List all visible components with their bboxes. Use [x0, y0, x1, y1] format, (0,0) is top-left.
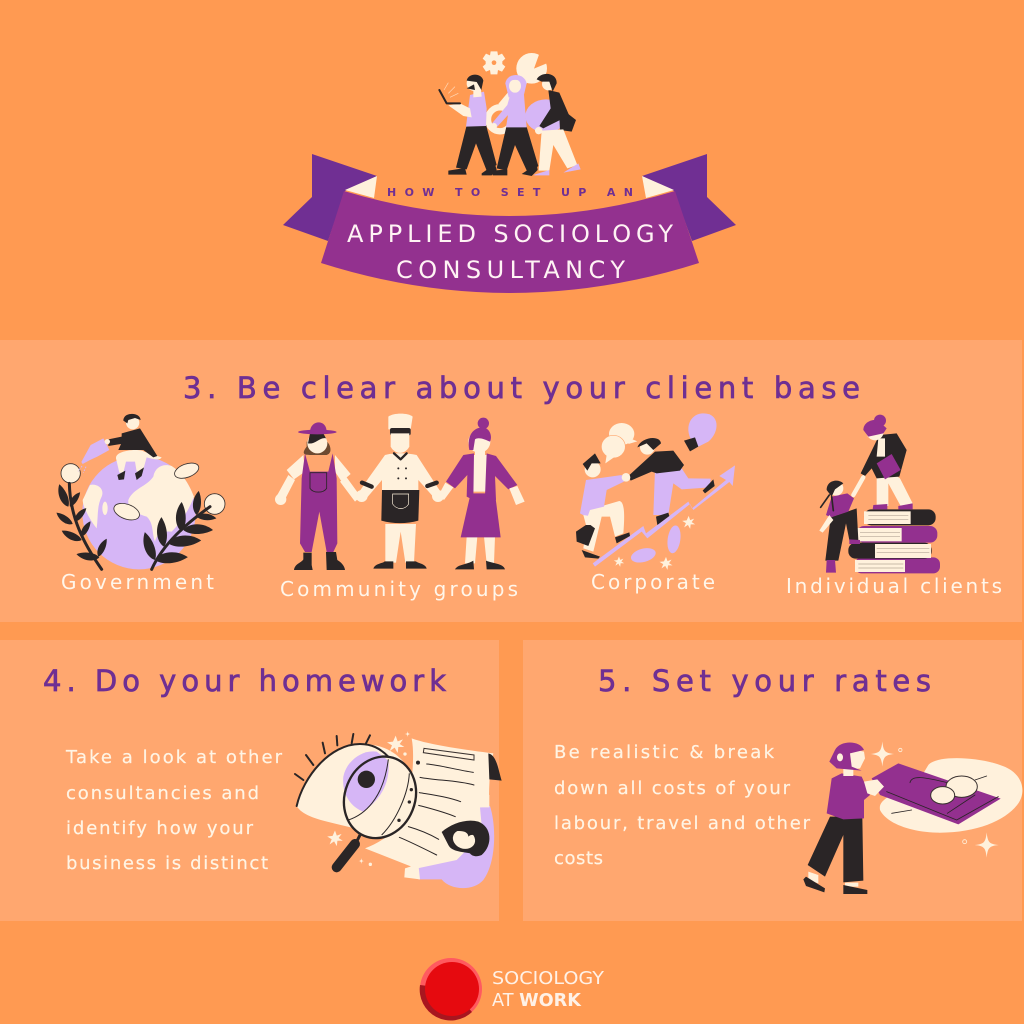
logo text line 2: AT WORK — [492, 990, 582, 1011]
logo text: SOCIOLOGY — [492, 968, 605, 989]
heading: 5. Set your rates — [598, 664, 931, 698]
title line 1: APPLIED SOCIOLOGY — [347, 220, 673, 248]
person: woman in overalls — [275, 422, 361, 570]
sparkles — [327, 731, 411, 866]
banner tails — [283, 154, 736, 241]
person: man with laptop — [439, 75, 497, 175]
laurel branches — [54, 483, 217, 569]
illustration: person with wallet and coins — [803, 741, 1022, 894]
coins — [931, 776, 977, 804]
speech bubbles — [601, 423, 637, 463]
label: Individual clients: Individual clients — [786, 574, 1002, 598]
body text: down all costs of your — [554, 778, 791, 799]
person: woman in purple suit — [439, 418, 525, 569]
person: woman climbing — [622, 438, 715, 525]
icon: light bulb — [684, 413, 717, 451]
eye — [295, 734, 406, 837]
body text: identify how your — [66, 818, 254, 839]
body text — [65, 747, 283, 874]
illustration: team carrying tools — [439, 50, 581, 176]
logo: Sociology at Work — [420, 958, 605, 1021]
heading: 4. Do your homework — [43, 664, 446, 698]
person: woman holding document — [404, 792, 494, 888]
coins — [61, 460, 225, 523]
logo mark — [420, 958, 482, 1021]
body text: costs — [554, 848, 603, 869]
panel: set your rates — [523, 640, 1022, 921]
body text: Take a look at other — [65, 747, 283, 768]
label: Community groups: Community groups — [280, 577, 518, 601]
person — [803, 742, 884, 894]
growth arrow — [593, 465, 735, 567]
panel background — [0, 340, 1022, 622]
person: standing woman — [853, 415, 913, 509]
label: Government: Government — [61, 570, 214, 594]
banner folds — [345, 176, 674, 198]
icon: gear — [483, 51, 505, 74]
heading: 3. Be clear about your client base — [183, 371, 860, 405]
body text — [554, 742, 811, 869]
illustration: community group people — [275, 414, 525, 570]
person: woman in hijab — [491, 75, 538, 176]
title line 2: CONSULTANCY — [396, 256, 625, 284]
magnifier — [332, 746, 428, 867]
globe — [82, 456, 196, 569]
label: Corporate: Corporate — [591, 570, 715, 594]
illustration: magnifier, eye and document — [295, 731, 502, 888]
coins and sparkles — [614, 516, 695, 570]
panel: client base — [0, 340, 1022, 622]
continents — [83, 465, 194, 542]
book stack — [848, 509, 940, 573]
body text: consultancies and — [66, 783, 259, 804]
illustration: individual clients on books — [819, 415, 940, 573]
child watering — [78, 414, 162, 480]
wallet — [872, 763, 1001, 824]
body text: labour, travel and other — [554, 813, 811, 834]
person: climbing girl — [819, 481, 860, 573]
title banner — [283, 154, 736, 293]
body text: business is distinct — [66, 853, 268, 874]
person: man climbing — [576, 453, 630, 559]
sparkles — [870, 741, 999, 858]
illustration: government globe — [54, 414, 225, 569]
document — [365, 738, 502, 870]
banner main band — [321, 191, 699, 293]
person: chef — [356, 414, 445, 569]
illustration: corporate handshake and arrow — [576, 413, 735, 570]
kicker text: HOW TO SET UP AN — [387, 186, 633, 199]
body text: Be realistic & break — [554, 742, 775, 763]
panel background — [0, 640, 499, 921]
cream cloud — [880, 758, 1022, 833]
panel: do your homework — [0, 640, 502, 921]
person: woman carrying bulb — [525, 74, 581, 175]
panel background — [523, 640, 1022, 921]
wallet details — [887, 776, 998, 820]
icon: wrench — [488, 50, 553, 131]
